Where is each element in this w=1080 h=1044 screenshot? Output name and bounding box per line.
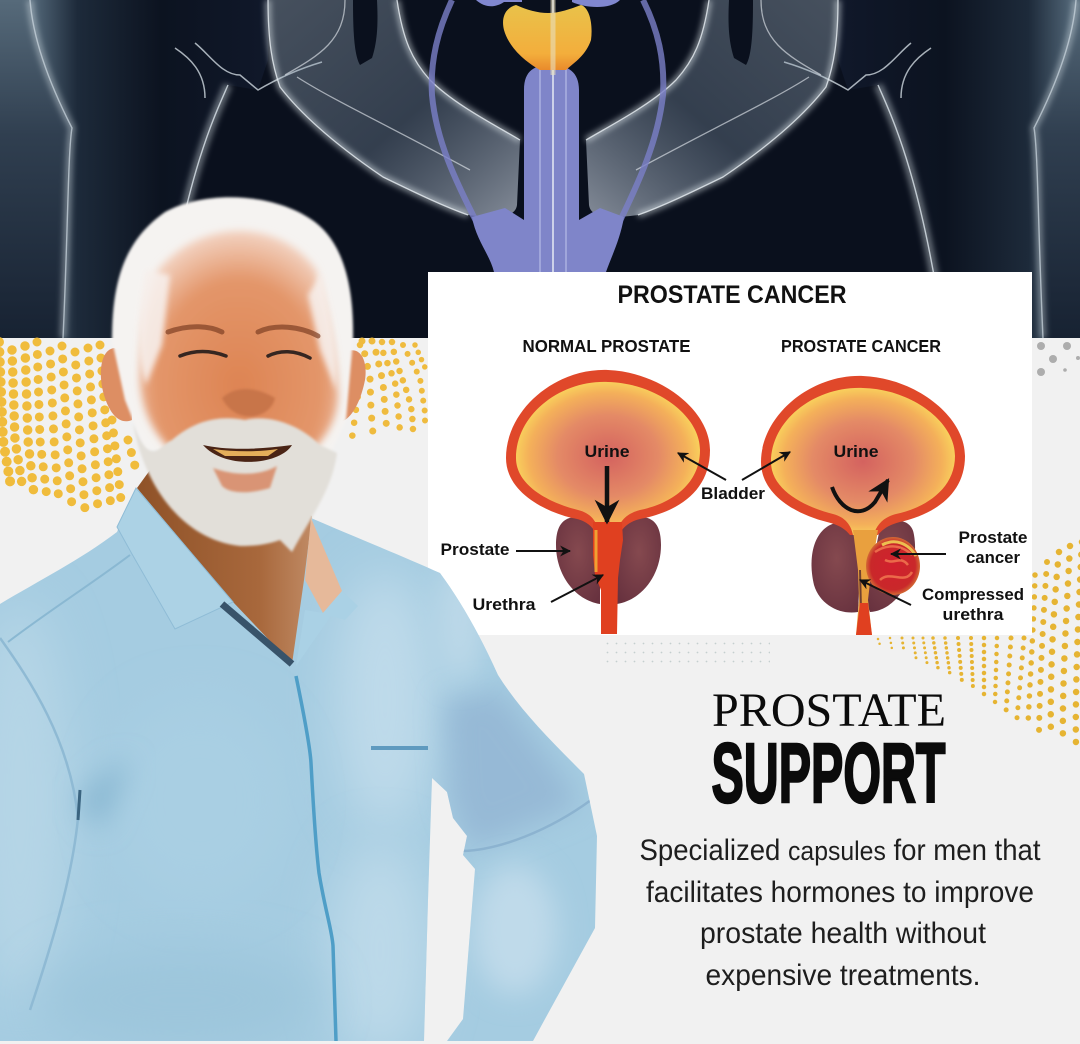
diagram panel: prostate cancer — [428, 272, 1032, 635]
golden prostate gland — [503, 5, 592, 70]
pelvis anatomy photo panel — [0, 0, 1080, 338]
title — [712, 684, 946, 820]
description text: prostate health without — [700, 917, 987, 950]
diagram labels: Urethra — [472, 595, 536, 614]
left pelvic skeleton — [0, 0, 520, 338]
inner collar — [305, 518, 342, 613]
shirt — [0, 480, 600, 1044]
diagram labels: Urine — [834, 442, 878, 461]
neck — [137, 470, 312, 664]
button placket — [296, 676, 336, 1041]
normal prostate illustration — [506, 370, 710, 634]
right pelvic skeleton — [586, 0, 1080, 338]
dark placket — [222, 604, 292, 664]
breast pocket — [371, 746, 428, 750]
blue urethra and base — [472, 0, 624, 272]
diagram labels: Prostate — [440, 540, 510, 559]
blue vas deferens tubes — [432, 0, 663, 225]
diagram labels — [440, 442, 1028, 624]
mouth — [203, 445, 292, 462]
ears — [101, 348, 132, 421]
eyebrows and eyes — [168, 327, 318, 358]
diagram labels: urethra — [942, 605, 1004, 624]
description text: facilitates hormones to improve — [646, 876, 1034, 909]
left collar — [117, 488, 233, 629]
diagram arrows — [516, 452, 946, 605]
gold halftone dots: lower right — [878, 542, 1080, 747]
hair — [112, 197, 353, 450]
faint dots — [600, 636, 770, 664]
face — [140, 231, 338, 480]
cancer prostate illustration — [761, 376, 965, 635]
bladder tops — [476, 0, 620, 7]
diagram labels: Urine — [584, 442, 630, 461]
diagram labels: Compressed — [922, 585, 1024, 604]
man in blue shirt — [0, 197, 600, 1044]
description text: Specialized capsules for men that — [640, 834, 1041, 867]
description text — [640, 834, 1041, 992]
gold halftone dots: beside head — [352, 341, 427, 438]
right collar — [296, 591, 358, 666]
title: PROSTATE — [712, 684, 946, 737]
diagram labels: Bladder — [701, 484, 765, 503]
white temple streaks — [138, 270, 337, 390]
diagram labels: Prostate — [958, 528, 1028, 547]
subheading: prostate cancer: PROSTATE CANCER — [781, 336, 941, 356]
diagram labels: cancer — [966, 548, 1020, 567]
description text: expensive treatments. — [706, 959, 980, 992]
gold halftone dots: top left — [0, 342, 135, 513]
beard — [133, 418, 337, 552]
diagram heading: PROSTATE CANCER — [618, 281, 846, 309]
grey dots top right — [1037, 342, 1080, 376]
tumour — [866, 537, 920, 595]
nose — [222, 389, 275, 416]
subheading: normal prostate: NORMAL PROSTATE — [522, 336, 690, 356]
